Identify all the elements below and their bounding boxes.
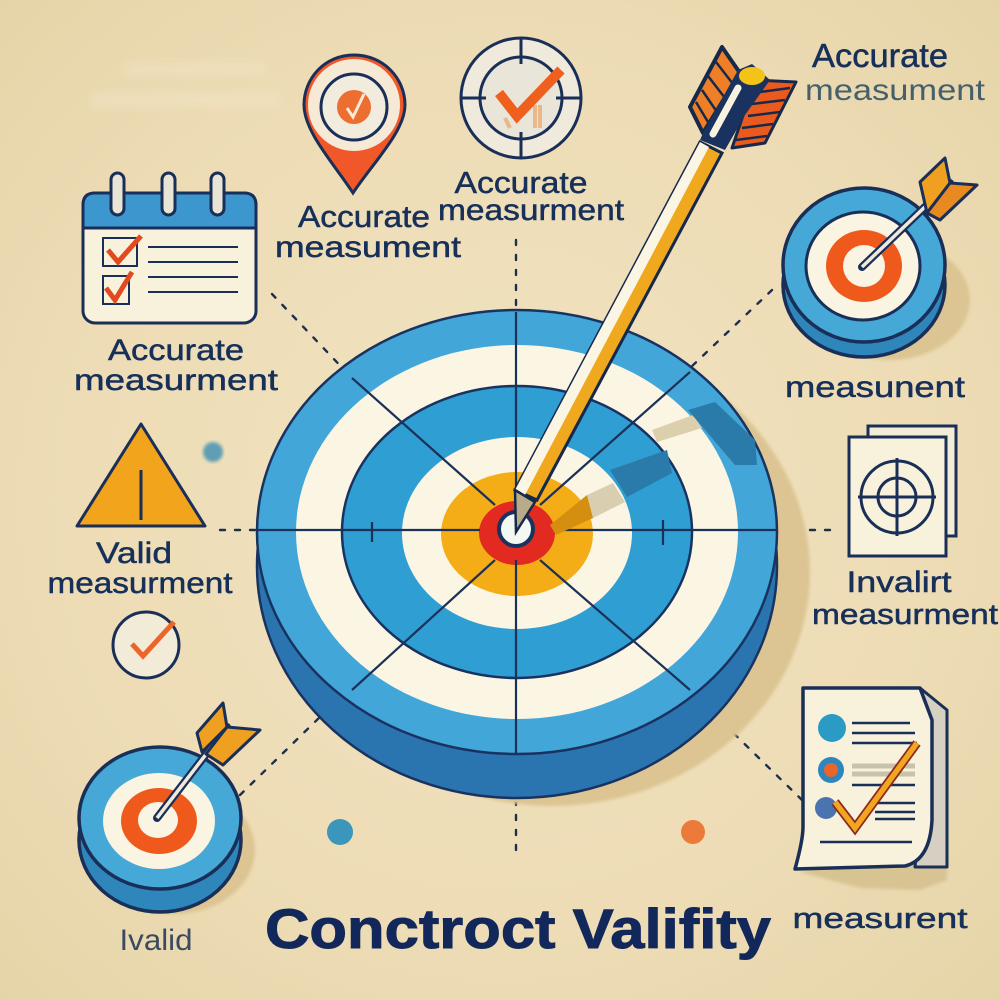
title: Conctroct Valifity [265, 897, 771, 960]
arrow fletching [690, 47, 740, 133]
label: calendar: measurment [74, 364, 279, 397]
target rings [257, 310, 777, 754]
label: top right: Accurate [812, 37, 948, 74]
label: top centre: Accurate [454, 165, 588, 200]
label: top right: measument [805, 74, 986, 107]
icon: small blue dot [203, 442, 223, 462]
label: valid: measurment [48, 567, 233, 600]
label: valid: Valid [96, 537, 172, 570]
icon: calendar checklist [83, 173, 256, 323]
icon: crosshair check [461, 38, 582, 158]
target bullseye [499, 512, 533, 546]
icon: checklist document [795, 688, 947, 890]
icon: small check circle [113, 612, 179, 678]
central target [257, 310, 810, 806]
arrow cast shadow [550, 402, 757, 535]
label: calendar [74, 334, 279, 397]
label: invalid measurement: Invalirt [846, 566, 952, 599]
arrow tip [515, 490, 535, 532]
icon: target upper right [783, 158, 977, 360]
label: bottom right: measurent [792, 903, 968, 935]
icon: location pin [304, 55, 405, 193]
label: invalid: Ivalid [120, 924, 192, 957]
decorative dots [327, 819, 705, 845]
label: invalid measurement: measurment [812, 599, 998, 631]
label: pin 2: measument [275, 231, 462, 264]
blurred faded heading [90, 62, 280, 108]
label: calendar: Accurate [108, 334, 244, 367]
target shadow [294, 338, 810, 806]
label: measurement right: measunent [785, 371, 966, 404]
label: valid [48, 537, 233, 600]
label: invalid measurement [812, 566, 998, 631]
label: top centre 2: measurment [438, 194, 625, 227]
icon: document crosshair [849, 426, 956, 556]
arrow shaft [515, 142, 722, 500]
label: pin: Accurate [298, 199, 430, 234]
label: top right [805, 37, 986, 107]
dashed guide lines [220, 240, 830, 860]
icon: target lower left [79, 703, 260, 914]
icon: warning triangle [77, 424, 205, 526]
large arrow [515, 47, 796, 532]
crosshair lines [258, 312, 778, 755]
target base [257, 334, 777, 798]
